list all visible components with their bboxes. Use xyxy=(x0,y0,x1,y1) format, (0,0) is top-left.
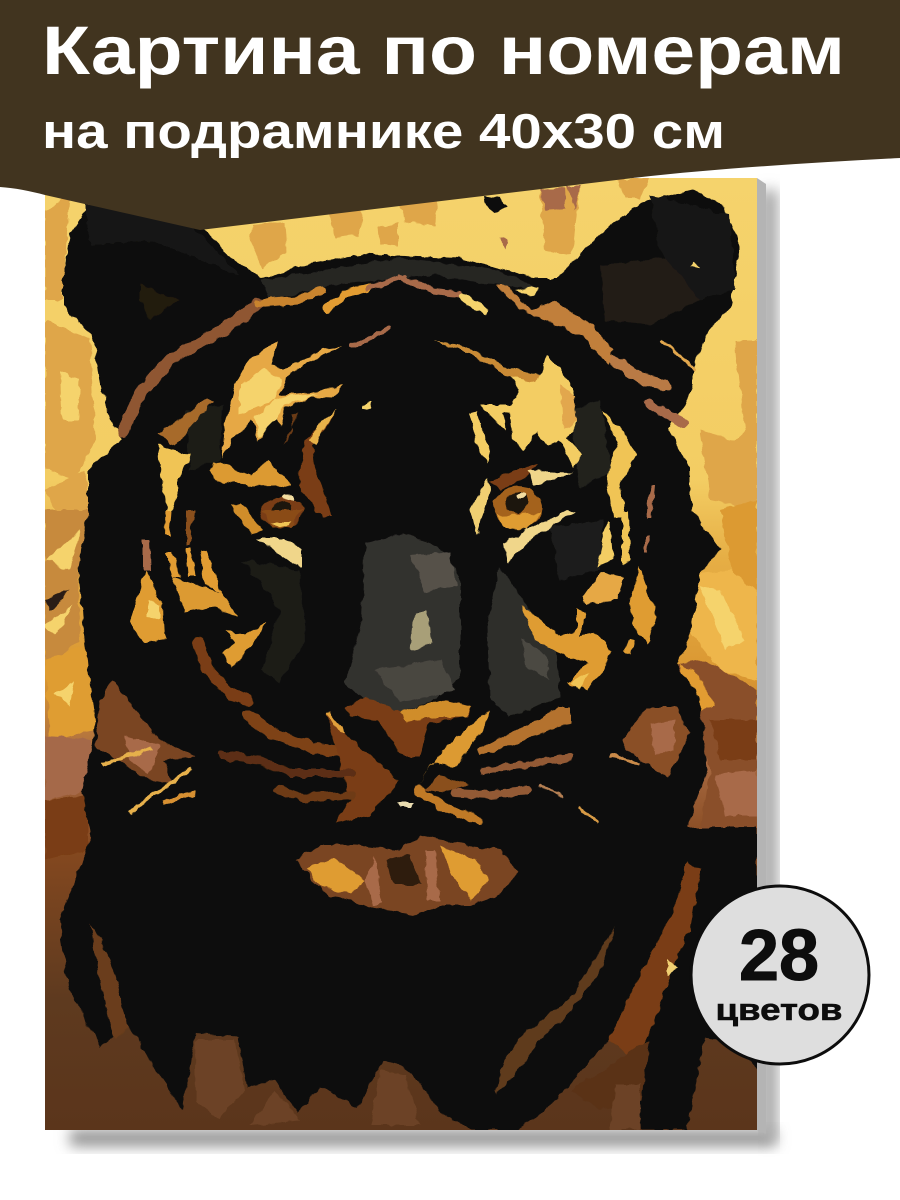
left side fur xyxy=(45,509,96,859)
right cheek stripes xyxy=(520,510,657,690)
painting background xyxy=(45,178,757,1130)
chin fur xyxy=(295,835,518,915)
small black blot xyxy=(485,195,508,212)
tiger silhouette xyxy=(59,190,757,1130)
number 28: 28 xyxy=(739,916,819,996)
right side fur xyxy=(677,500,757,830)
dark shading on the fur xyxy=(85,195,735,683)
left whiskers xyxy=(222,712,398,823)
grey muzzle bridge xyxy=(345,533,560,717)
brown fur patch on left cheek xyxy=(95,680,195,812)
nose xyxy=(345,697,472,808)
left cheek stripes xyxy=(130,510,267,667)
canvas side shadow xyxy=(70,178,778,1146)
bottom fur lighter tone xyxy=(195,1040,640,1130)
lower right fur streak xyxy=(495,925,616,1095)
header banner xyxy=(0,0,900,230)
orange strip between ear and head xyxy=(123,277,693,430)
left eye xyxy=(230,494,303,568)
title: Картина по номерам xyxy=(42,12,845,89)
right shoulder orange streak xyxy=(608,862,702,1101)
subtitle: на подрамнике 40х30 см xyxy=(42,105,725,159)
left brow bright fur xyxy=(158,341,373,518)
painting: tiger on canvas xyxy=(45,178,757,1130)
brown fur patch on right cheek xyxy=(610,707,690,777)
right muzzle whiskers xyxy=(417,707,598,823)
mauve spots top xyxy=(500,186,580,250)
lower left fur streak xyxy=(91,923,128,1040)
badge: colour count xyxy=(691,886,869,1064)
right eye xyxy=(470,463,575,563)
right brow bright fur xyxy=(433,341,655,518)
label цветов: цветов xyxy=(716,992,842,1027)
background blotches top xyxy=(45,178,757,520)
upper right forehead strip xyxy=(495,262,700,365)
left cheek brown curve xyxy=(197,642,247,700)
